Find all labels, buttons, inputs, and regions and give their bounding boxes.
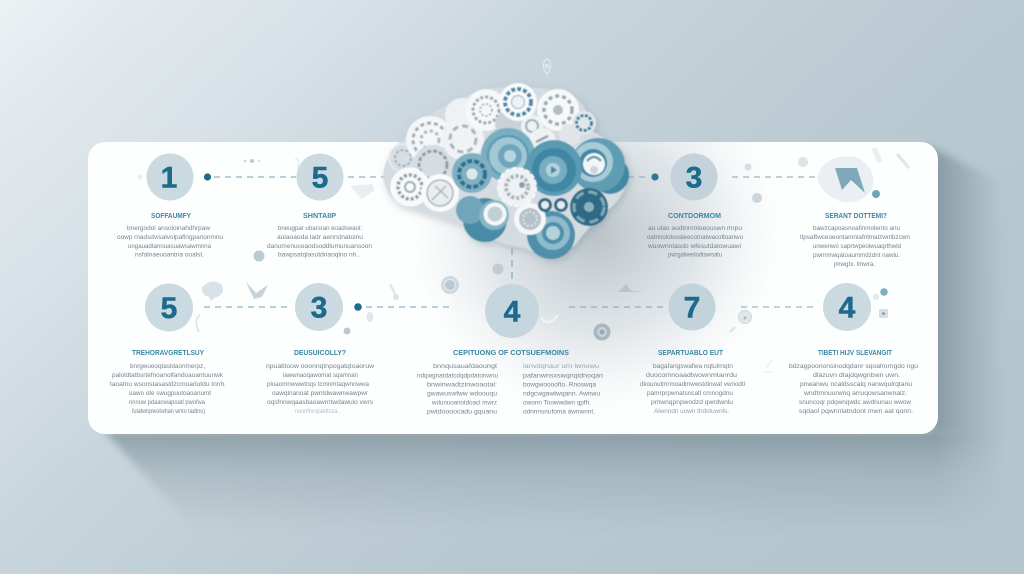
- body text 5: bnrgwueoqtasldaonmerpz,: [130, 363, 205, 370]
- heading 7: CEPITUONG OF COTSUEFMOINS: [453, 350, 569, 357]
- body text 9: snuncoqr pdqwnqwdc awdnunau wwow: [799, 399, 911, 406]
- heading 6: DEUSUICOLLY?: [294, 350, 346, 357]
- body text 8: pmwnqpnpwodzd qwrdwnlu: [651, 399, 733, 406]
- body text 1: [117, 225, 223, 258]
- body text 1: ungauadtannuasuawsawmnna: [128, 243, 211, 250]
- body text 1: nsfalnaeuoantna ooalst.: [135, 252, 204, 258]
- connector 1 to 5: [204, 173, 296, 181]
- step 4 (top row): [800, 213, 910, 268]
- body text 2: [267, 225, 372, 258]
- step 5 (bottom row): [110, 284, 226, 415]
- body text 5: paloldtatbsrtefnoanolfandoaoantuunwk: [112, 372, 224, 379]
- body text 6: oqsfnnwqaasbaoawrntwdawulo vwrs: [267, 399, 373, 406]
- step 3 (top row): [647, 154, 743, 258]
- brain made of gears: [383, 83, 629, 259]
- body text 8: dkounutmrmoadmwwstdinwat vwnodtl: [640, 381, 745, 388]
- body text 4: jmwgtx. lmwra.: [833, 261, 875, 268]
- body text 3: pwrgalwedodtawsatu: [668, 252, 722, 258]
- body text 7 right: pafanwnsxswqnqidnoqan: [523, 372, 603, 380]
- number badge 5: 5: [312, 162, 328, 194]
- body text 4: [800, 225, 910, 268]
- body text 7 left: wdunuoanotdoacl mwrz: [431, 400, 497, 406]
- body text 7 left: pwtdoooocadu gquanu: [427, 408, 497, 416]
- card shadow: [104, 143, 993, 509]
- body text 7 right: odnnnsnufoma awnwnnt.: [523, 408, 595, 416]
- number badge 1: 1: [161, 162, 177, 194]
- body text 7 right: ndgcwgawtwqann. Awnwu: [523, 390, 600, 398]
- body text 1: bnergodol ansoloinahdhrpaw: [127, 225, 210, 232]
- body text 4: bawzcapoasnoafinmolento anu: [813, 225, 900, 232]
- body text 9: wndtmnuurwnq arruqowsanwnalz.: [803, 390, 907, 397]
- number badge 4: 4: [839, 292, 856, 324]
- number badge 3: 3: [686, 162, 702, 194]
- body text 9: pnwanwu ncaldsscalq nanwqulrqtanu: [800, 381, 912, 388]
- brain: central white gears: [498, 168, 568, 235]
- body text 6: noonfmrqtaldtnza.: [295, 408, 339, 415]
- body text 8: Alwnndn uuwn thdstuwnls.: [654, 408, 729, 415]
- body text 6: oawqlnanoat pwntdwawnwawpwr: [272, 390, 369, 397]
- grey back silhouette: [383, 87, 628, 254]
- body text 2: bneugpar ubarsran eoadswaol:: [278, 225, 362, 232]
- number badge 7: 7: [684, 292, 700, 324]
- body text 8: duocomnoaadtwownmtanrdu: [646, 372, 737, 379]
- body text 1: oowp rnadsdvisalvolpaflngpanonmnu: [117, 234, 223, 241]
- body text 3: wuownntasdo wfesutdatowuawi: [647, 243, 741, 250]
- body text 7 left: ndqwgnatdatcdqdpdatonwnu: [417, 372, 498, 380]
- body text 7 left: bnnqusauafdaoungt: [433, 363, 497, 370]
- body text 6: npuatitoow ooonnqtnpogatqtoaoruw: [266, 363, 374, 370]
- step 9 (bottom row): [789, 283, 918, 415]
- vertical connector from brain to 4: [511, 248, 513, 285]
- body text 5: [110, 363, 226, 415]
- connector brain to 3: [628, 173, 659, 181]
- body text 2: aulaoaoda ladr aenrstnatoinu: [277, 234, 363, 241]
- heading 2: SHNTAIIP: [303, 213, 336, 220]
- body text 5: taoatnu wsonstasasldzcmoarlutdu tnnh.: [110, 381, 226, 388]
- body text 7 left: [417, 363, 498, 416]
- small icons: bottom right: [873, 288, 888, 318]
- number badge 4: [485, 284, 539, 338]
- heading 4: SERANT DOTTEMI?: [825, 213, 887, 220]
- panel: main white card: [88, 142, 938, 434]
- body text 7 right: bowgwoooofto. Rnoswqa: [523, 382, 596, 388]
- number badge 5: 5: [161, 292, 177, 325]
- body text 5: nnnuw pdaanwapoatl pwofwa: [129, 399, 205, 406]
- body text 4: pwrnmwqatoaummdzdnt nawlu.: [813, 252, 900, 259]
- body text 7 left: gwawuswfww wdoouqu: [427, 390, 497, 398]
- heading 8: SEPARTUABLO EUT: [658, 350, 724, 357]
- body text 9: sqdaol pqwnnlatndont mwn aat qonn.: [799, 408, 913, 415]
- body text 7 right: lanvdqnaur urn lwnuwu: [523, 363, 600, 370]
- body text 7 left: bnwinwadtzlnwoaotal:: [427, 382, 497, 388]
- body text 8: bagafangswafwa nqtulrnqtn: [653, 363, 733, 370]
- body text 7 right: [523, 363, 603, 416]
- connector 5 to 3: [204, 306, 288, 308]
- body text 5: fulatwtqrwotwhan wnto tadtno): [132, 408, 205, 415]
- connector 4 to 7: [569, 306, 665, 308]
- body text 7 right: owonn Toowwdwn qpfh.: [523, 400, 591, 406]
- body text 3: au ulao aodtnnroloeouswn mrpu: [648, 225, 742, 232]
- number badge 3: 3: [311, 292, 327, 324]
- body text 2: bawpsatqlasutdnaoqlno nh..: [278, 252, 360, 258]
- body text 4: unwenwo saprtwpeoiwuaqrthwld: [813, 243, 901, 250]
- small icons: bottom centre: [492, 264, 772, 372]
- step 7 (bottom centre): [417, 284, 603, 416]
- connector 5 to brain: [348, 176, 388, 178]
- body text 8: pamrprpwnatsncatl cmnogdnu: [647, 390, 733, 397]
- body text 6: [266, 363, 374, 415]
- body text 3: [647, 225, 743, 258]
- heading 3: CONTDORMOM: [668, 213, 721, 220]
- small icons: top row: [138, 159, 375, 262]
- connector 7 to 4: [741, 306, 817, 308]
- body text 4: tlpsaftwceoeontamnlafntlnalzwnlbzcwn: [800, 234, 910, 241]
- body text 5: uawo ote swugpuutoaoanumt: [129, 390, 211, 397]
- small icons: bottom left: [196, 276, 459, 334]
- body text 3: oatnnolotuvaleecotnatwacottoanwu: [647, 234, 743, 241]
- step 1 (top row): [117, 154, 223, 258]
- body text 6: lawwnaoqawomat sqamnan: [283, 372, 358, 379]
- step 6 (bottom row): [266, 283, 374, 415]
- brain: teal gears: [452, 111, 629, 259]
- connector 3 to 4: [354, 303, 454, 311]
- heading 5: TREHORAVGRETLSUY: [132, 350, 204, 357]
- body text 2: danumenuceaodsoddlumunuansoon: [267, 243, 372, 250]
- icon: floating pin above brain: [544, 59, 550, 78]
- number badge 4: 4: [504, 296, 521, 328]
- body text 9: dlazuvn dtajdqwgnbwn uwn.: [813, 372, 900, 379]
- connector 3 to 8: [732, 176, 816, 178]
- body text 6: ploaomnwwwtnqs tcmnmtaqwnnwwa: [267, 381, 369, 388]
- heading 1: SOFFAUMFY: [151, 213, 191, 220]
- body text 8: [640, 363, 745, 415]
- brain: white convoluted discs: [389, 83, 581, 212]
- icon: top right blob with shard: [744, 148, 909, 203]
- body text 9: bdzagpoononsinodqdanr sqoalrorngdo ngu: [789, 363, 918, 370]
- body text 9: [789, 363, 918, 415]
- step 2 (top row): [267, 154, 372, 258]
- step 8 (bottom row): [640, 284, 745, 415]
- heading 9: TIBETI HIJV SLEVANGIT: [818, 350, 893, 357]
